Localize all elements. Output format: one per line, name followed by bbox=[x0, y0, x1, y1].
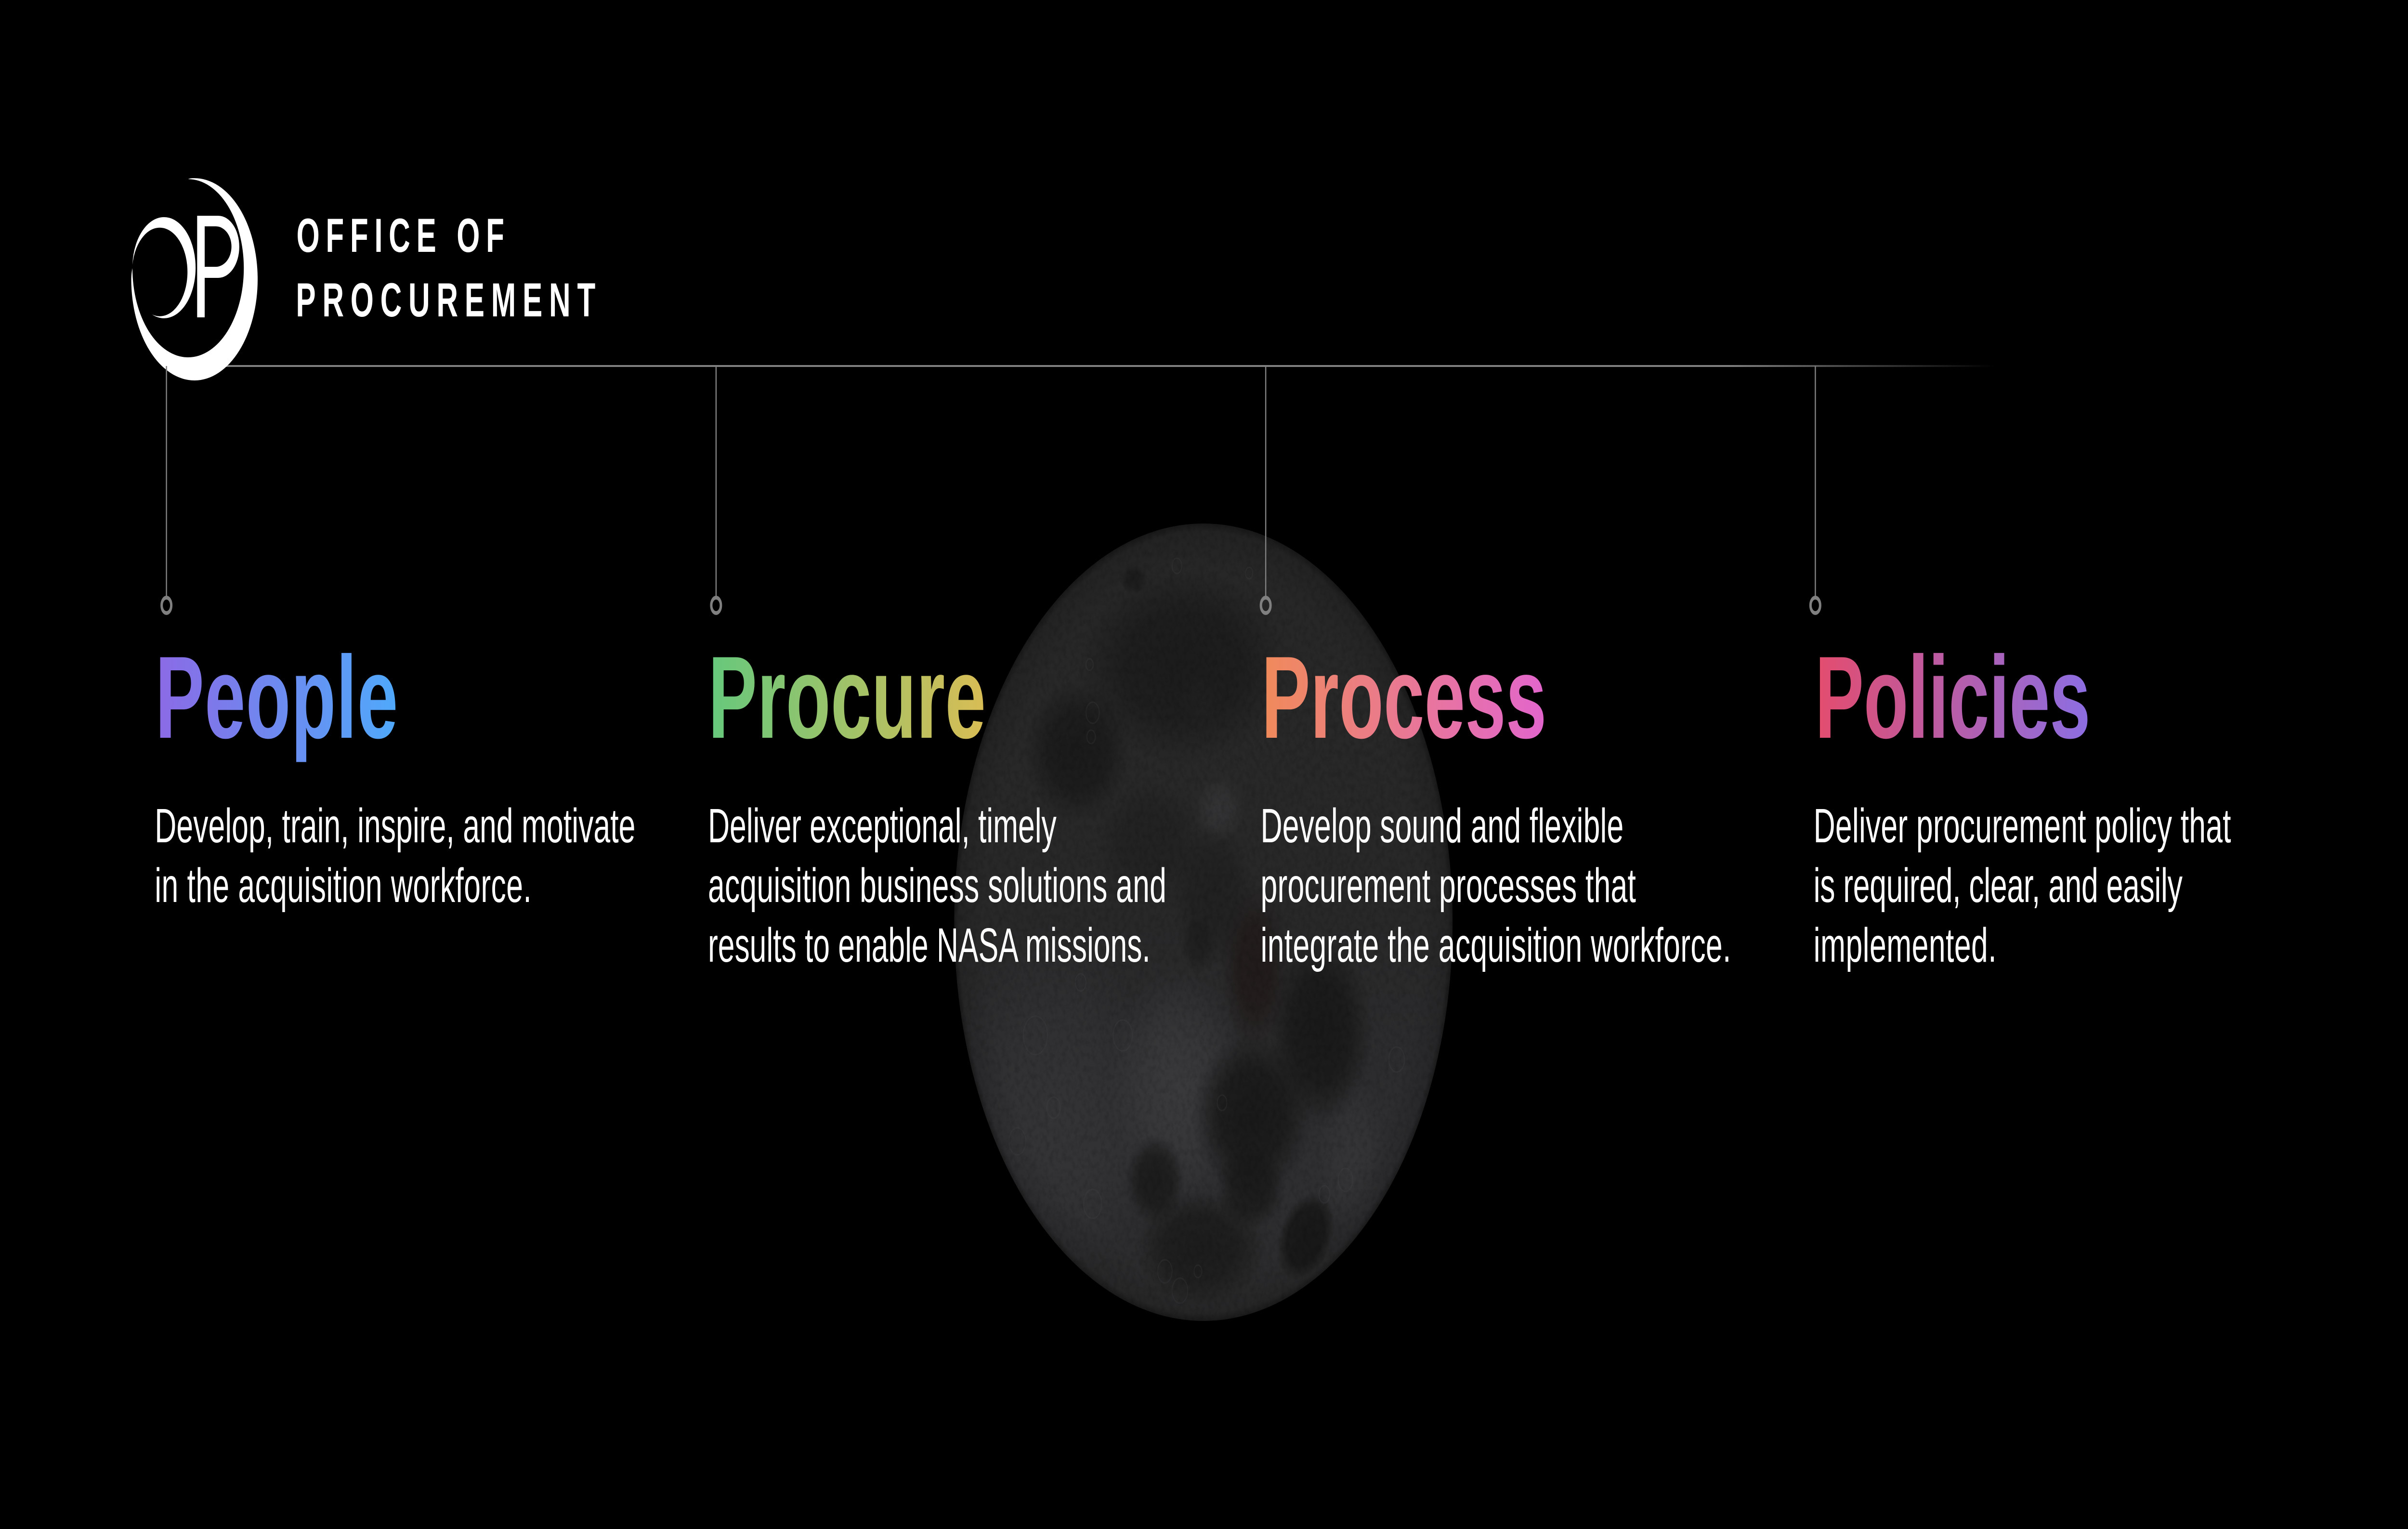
heading: process: Process bbox=[1261, 632, 1546, 763]
connector: policies bbox=[1810, 366, 1820, 613]
timeline rule bbox=[211, 365, 1996, 367]
surface crater texture bbox=[954, 523, 1453, 1321]
description: process: procurement processes that bbox=[1261, 859, 1636, 913]
panel: people bbox=[155, 366, 635, 913]
connector: people bbox=[162, 366, 171, 613]
panel: policies bbox=[1810, 366, 2231, 972]
description: policies: implemented. bbox=[1814, 918, 1997, 972]
description: policies: Deliver procurement policy that bbox=[1814, 799, 2231, 853]
description: procure bbox=[708, 799, 1166, 972]
description: process: Develop sound and flexible bbox=[1261, 799, 1623, 853]
description: people: in the acquisition workforce. bbox=[155, 859, 532, 913]
description: people bbox=[155, 799, 635, 913]
heading: people: People bbox=[155, 632, 398, 763]
description: people: Develop, train, inspire, and motivate bbox=[155, 799, 635, 853]
moon illustration bbox=[954, 523, 1453, 1321]
panel: procure bbox=[708, 366, 1166, 972]
organisation name: OFFICE OF bbox=[297, 209, 504, 262]
limb shading bbox=[954, 523, 1453, 1321]
small craters bbox=[1086, 558, 1322, 1294]
description: procure: Deliver exceptional, timely bbox=[708, 799, 1057, 853]
bright highlands bbox=[957, 672, 1385, 1291]
description: policies bbox=[1814, 799, 2231, 972]
description: process: integrate the acquisition workforce. bbox=[1261, 918, 1731, 972]
panel: process bbox=[1261, 366, 1731, 972]
description: procure: results to enable NASA missions. bbox=[708, 918, 1151, 972]
brown mare streak bbox=[1231, 911, 1279, 1030]
description: process bbox=[1261, 799, 1731, 972]
organisation name bbox=[296, 209, 595, 327]
heading: policies: Policies bbox=[1815, 632, 2091, 763]
description: policies: is required, clear, and easily bbox=[1814, 859, 2183, 913]
logo: OP crescent mark bbox=[131, 178, 258, 380]
organisation name: PROCUREMENT bbox=[296, 274, 595, 327]
connector: procure bbox=[711, 366, 721, 613]
dark lunar maria bbox=[1025, 565, 1373, 1305]
description: procure: acquisition business solutions and bbox=[708, 859, 1166, 913]
connector: process bbox=[1261, 366, 1270, 613]
round dark basin bbox=[1281, 1198, 1331, 1273]
heading: procure: Procure bbox=[708, 632, 986, 763]
